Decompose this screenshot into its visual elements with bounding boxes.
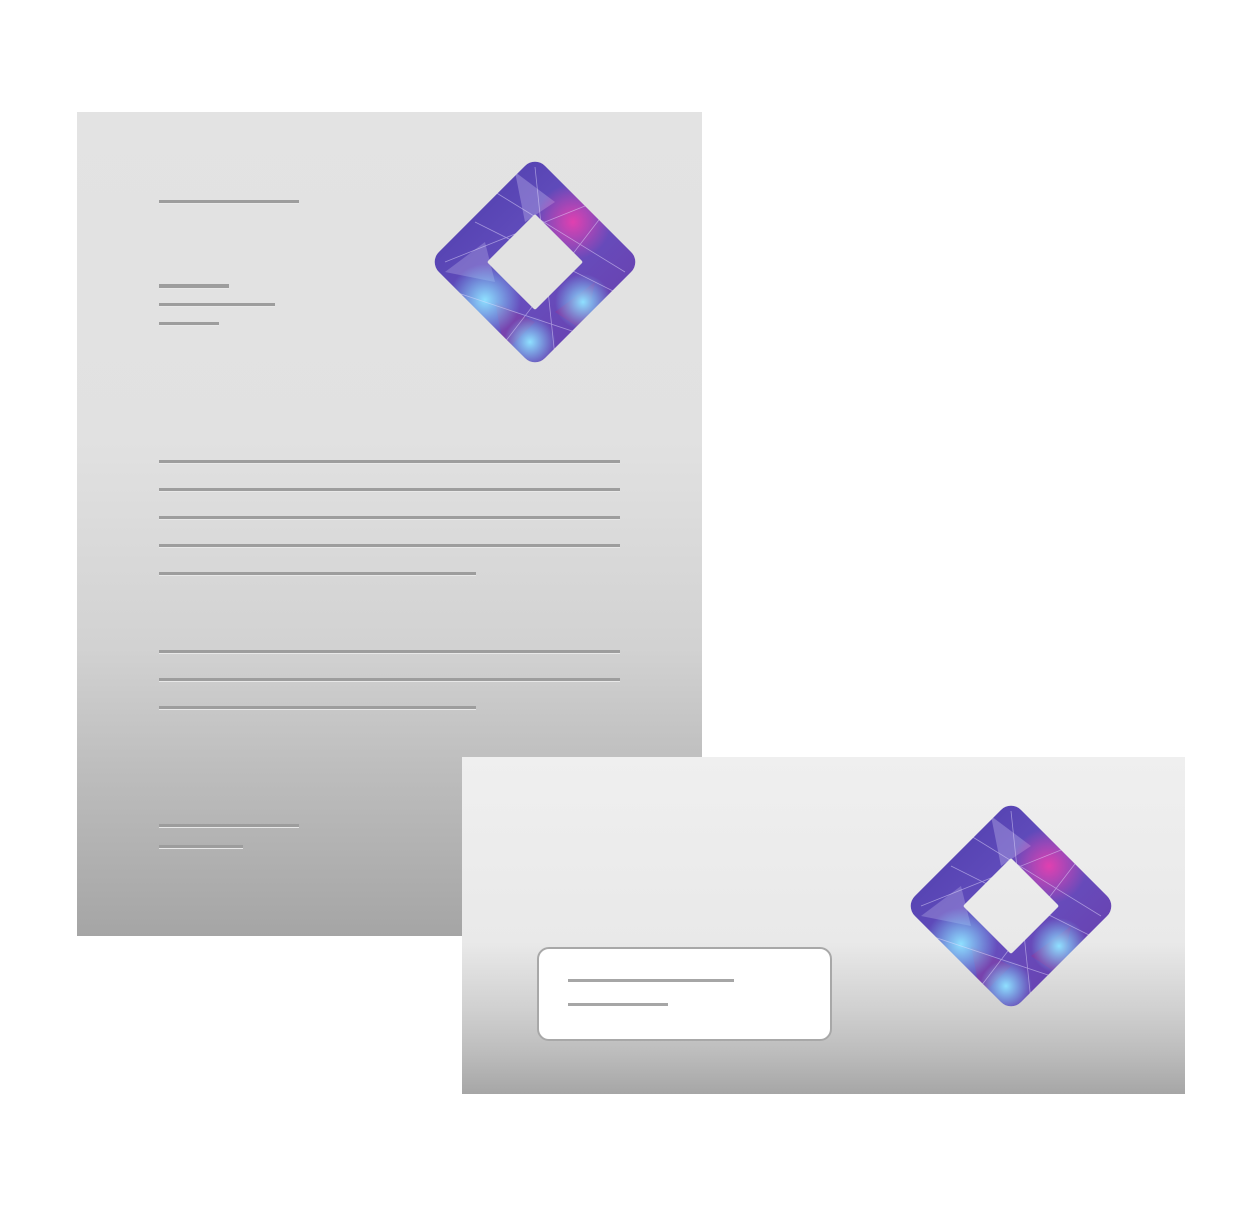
text block: body paragraph 2 [159,650,620,710]
text block: signature [159,824,299,849]
icon: logo on envelope [910,806,1112,1006]
text block: header line [159,200,299,204]
text block: address [159,284,275,325]
icon: logo on letterhead [434,162,636,362]
address window [537,947,832,1041]
panel: envelope [462,757,1185,1094]
text block: body paragraph 1 [159,460,620,576]
panel: letterhead [77,112,702,936]
